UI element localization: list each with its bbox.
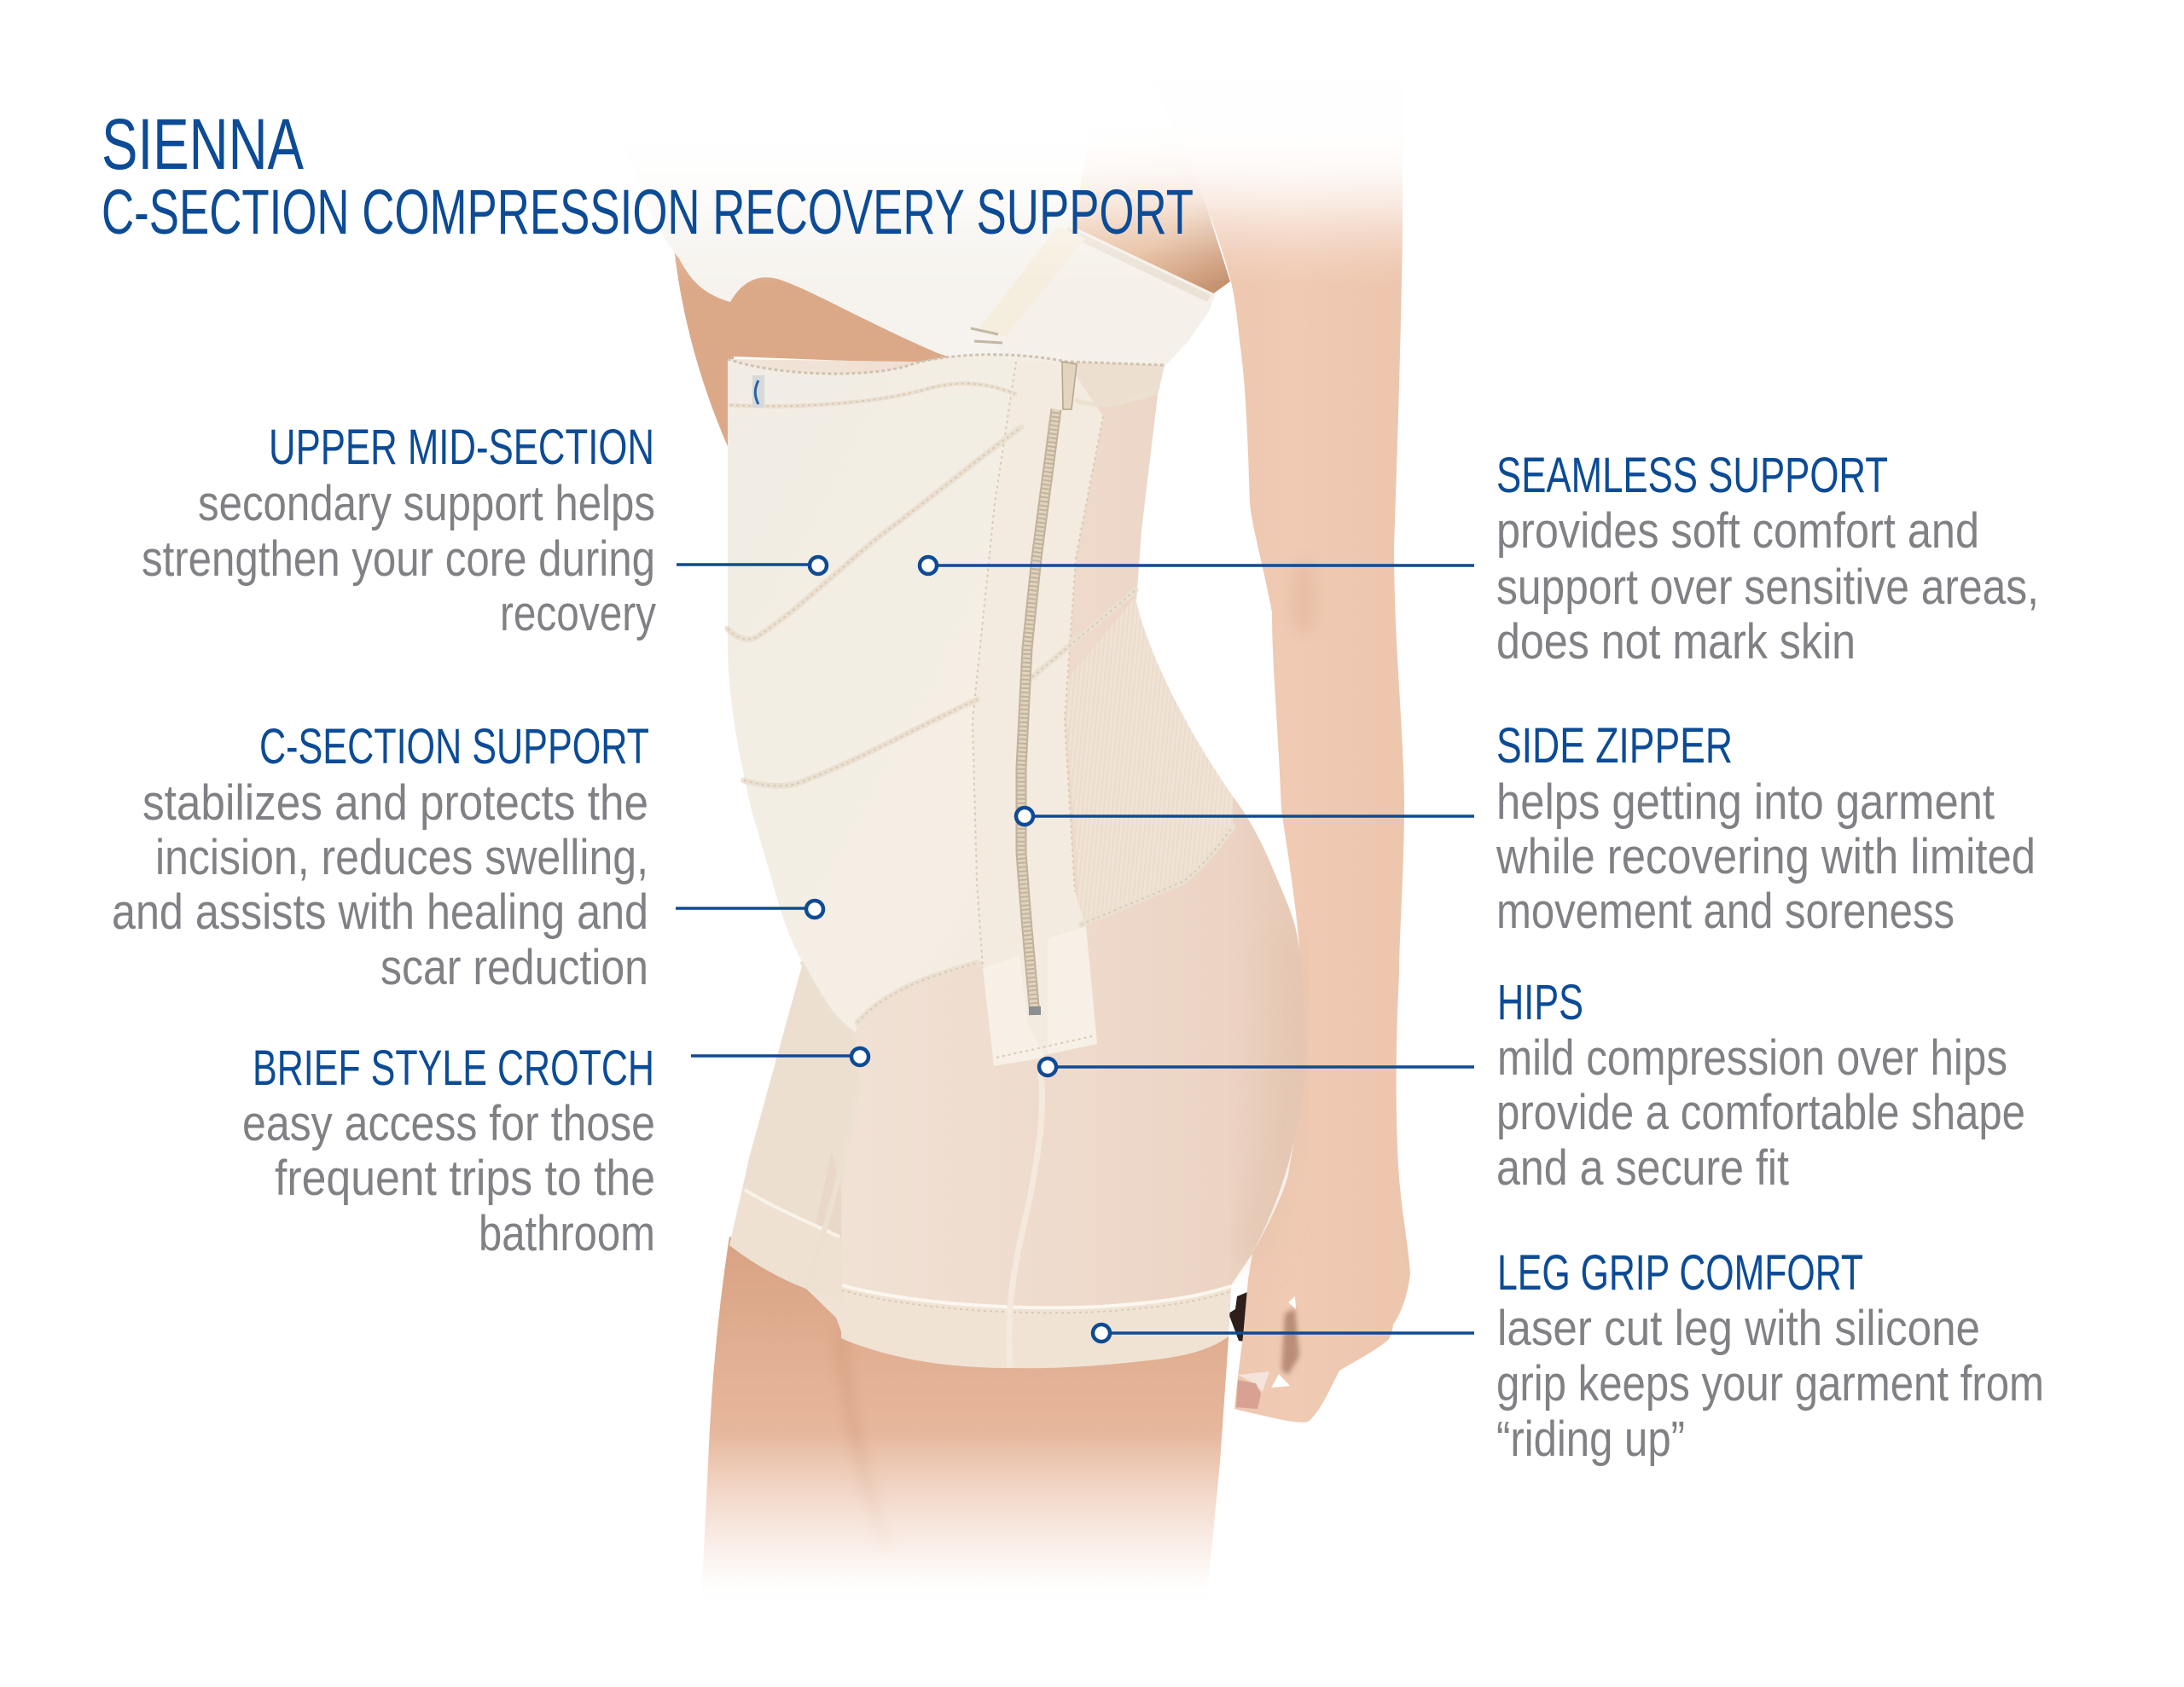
chest skin near armpit <box>1066 128 1230 297</box>
zipper pull <box>1062 362 1077 409</box>
callout: seamless support: SEAMLESS SUPPORT <box>1496 448 1888 503</box>
zipper <box>1021 409 1056 1015</box>
back rib panel <box>1065 597 1234 925</box>
shadow between thumb and fingers <box>1281 1308 1299 1375</box>
callout: upper mid-section <box>142 420 656 641</box>
callout: seamless support <box>1496 448 2039 670</box>
callout: hips: HIPS <box>1497 975 1583 1030</box>
callout: hips <box>1496 975 2025 1196</box>
callout: c-section support: and assists with healing and <box>112 884 648 940</box>
callout: c-section support: incision, reduces swelling, <box>155 830 648 885</box>
callout: leg grip comfort: laser cut leg with silicone <box>1497 1301 1980 1356</box>
callout: brief style crotch: easy access for those <box>242 1096 655 1151</box>
leader: hips <box>1039 1058 1474 1075</box>
callout: leg grip comfort: “riding up” <box>1496 1412 1685 1467</box>
callout: side zipper <box>1496 718 2036 939</box>
callout: leg grip comfort: grip keeps your garment from <box>1496 1356 2044 1412</box>
callout: brief style crotch: frequent trips to the <box>275 1151 655 1206</box>
title: C-SECTION COMPRESSION RECOVERY SUPPORT <box>102 177 1194 247</box>
callout: side zipper: helps getting into garment <box>1496 774 1995 830</box>
leader: side zipper <box>1016 808 1474 825</box>
leader: brief style crotch <box>691 1048 868 1065</box>
callout: brief style crotch: BRIEF STYLE CROTCH <box>253 1041 654 1096</box>
vertical leg seams <box>1009 1066 1042 1368</box>
leg bands <box>841 1284 1231 1368</box>
title: SIENNA <box>102 104 304 184</box>
callout: seamless support: provides soft comfort and <box>1496 503 1979 559</box>
callout: side zipper: while recovering with limited <box>1496 829 2036 884</box>
callout: upper mid-section: recovery <box>500 586 656 641</box>
callout: c-section support: C-SECTION SUPPORT <box>259 719 649 774</box>
fade of figure at top <box>597 43 1450 286</box>
bra cups <box>610 77 1101 362</box>
zipper stop <box>1029 1006 1041 1015</box>
callout: hips: and a secure fit <box>1496 1140 1789 1196</box>
title <box>102 104 1194 247</box>
black garment tail behind hand <box>1228 1292 1251 1342</box>
leader: leg grip comfort <box>1093 1325 1474 1342</box>
callout: brief style crotch <box>242 1041 655 1261</box>
shadow between the legs <box>840 1330 887 1552</box>
leader: seamless support <box>920 557 1474 574</box>
fade of figure at bottom <box>665 1433 1263 1603</box>
callout: upper mid-section: strengthen your core during <box>142 531 655 587</box>
callout: upper mid-section: secondary support helps <box>198 476 655 531</box>
callout: c-section support: scar reduction <box>380 940 648 995</box>
thumb nail <box>1238 1371 1269 1392</box>
callout: hips: mild compression over hips <box>1497 1030 2007 1086</box>
garment seams <box>728 427 1021 640</box>
thighs <box>701 1237 1231 1603</box>
gaps in the hand <box>1271 1296 1296 1388</box>
callout: brief style crotch: bathroom <box>479 1206 655 1261</box>
zipper flap <box>973 362 1103 1066</box>
garment label tag <box>752 375 764 408</box>
inner elbow shading <box>1290 559 1317 635</box>
leader: upper mid-section <box>677 557 827 574</box>
callout: upper mid-section: UPPER MID-SECTION <box>269 420 654 475</box>
callout: leg grip comfort: LEG GRIP COMFORT <box>1497 1245 1863 1301</box>
garment base: sheer shapewear <box>728 359 1306 1368</box>
leader: c-section support <box>676 901 823 918</box>
bra back band <box>990 223 1216 367</box>
near arm and hand <box>1152 77 1410 1423</box>
callout: c-section support <box>112 719 649 995</box>
callout: hips: provide a comfortable shape <box>1496 1085 2025 1140</box>
callout: c-section support: stabilizes and protects the <box>142 775 648 831</box>
figure: model wearing the garment <box>597 43 1450 1603</box>
far arm and belly skin <box>674 247 1007 450</box>
back upper band <box>1066 362 1165 404</box>
front opaque panel <box>728 355 1103 1036</box>
callout: leg grip comfort <box>1496 1245 2044 1467</box>
bra strap and hook <box>979 226 1085 337</box>
top scalloped edge <box>728 355 1165 374</box>
callout: side zipper: SIDE ZIPPER <box>1496 718 1733 774</box>
front shorts leg <box>729 963 860 1302</box>
callout: seamless support: does not mark skin <box>1496 614 1856 670</box>
callout: seamless support: support over sensitive areas, <box>1496 559 2039 615</box>
hip shading <box>1246 938 1294 1262</box>
callout: side zipper: movement and soreness <box>1496 884 1955 939</box>
